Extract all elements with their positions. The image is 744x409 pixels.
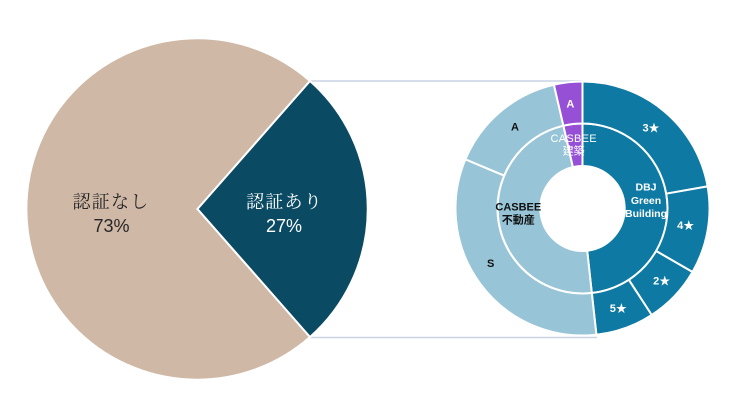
outer ring labels: A — [566, 98, 574, 110]
outer ring: S — [455, 159, 596, 335]
outer ring labels: S — [487, 258, 494, 270]
outer ring: A light — [465, 85, 563, 176]
inner label: CASBEE building — [550, 133, 597, 158]
inner label: DBJ Green Building — [625, 182, 667, 220]
inner label: CASBEE building: CASBEE — [550, 133, 597, 145]
inner label: DBJ Green Building: Green — [631, 195, 661, 207]
outer ring labels: A — [511, 122, 519, 134]
pie slice: certified 27% — [198, 81, 368, 337]
inner ring: CASBEE building — [563, 124, 582, 167]
inner ring: CASBEE real estate — [498, 126, 592, 293]
inner ring: DBJ Green Building — [582, 123, 668, 293]
outer ring: 3 star — [582, 81, 708, 194]
label: certified: 認証あり — [246, 188, 323, 214]
label: not certified — [73, 188, 149, 236]
outer ring: A purple — [554, 81, 582, 126]
label: not certified: 認証なし — [73, 188, 149, 214]
outer ring labels — [487, 98, 694, 315]
inner label: CASBEE real estate: CASBEE — [495, 201, 541, 213]
outer ring labels: 3★ — [642, 123, 660, 135]
outer ring: 5 star — [592, 280, 652, 335]
outer ring: 2 star — [629, 251, 692, 315]
inner label: DBJ Green Building: Building — [625, 208, 667, 220]
inner label: CASBEE real estate: 不動産 — [502, 213, 535, 227]
label: certified — [246, 188, 323, 236]
pie slice: not certified 73% — [26, 38, 310, 380]
inner label: CASBEE building: 建築 — [563, 144, 585, 158]
connector lines between pie wedge and donut — [310, 81, 597, 338]
label: not certified: 73% — [93, 216, 130, 236]
outer ring labels: 4★ — [677, 220, 694, 232]
inner label: DBJ Green Building: DBJ — [635, 182, 657, 194]
outer ring labels: 2★ — [653, 276, 670, 288]
label: certified: 27% — [266, 216, 302, 236]
outer ring: 4 star — [656, 186, 710, 272]
outer ring labels: 5★ — [610, 303, 627, 315]
inner label: CASBEE real estate — [495, 201, 541, 227]
pie chart: certified share — [26, 38, 368, 380]
donut chart: certification breakdown — [455, 81, 710, 335]
